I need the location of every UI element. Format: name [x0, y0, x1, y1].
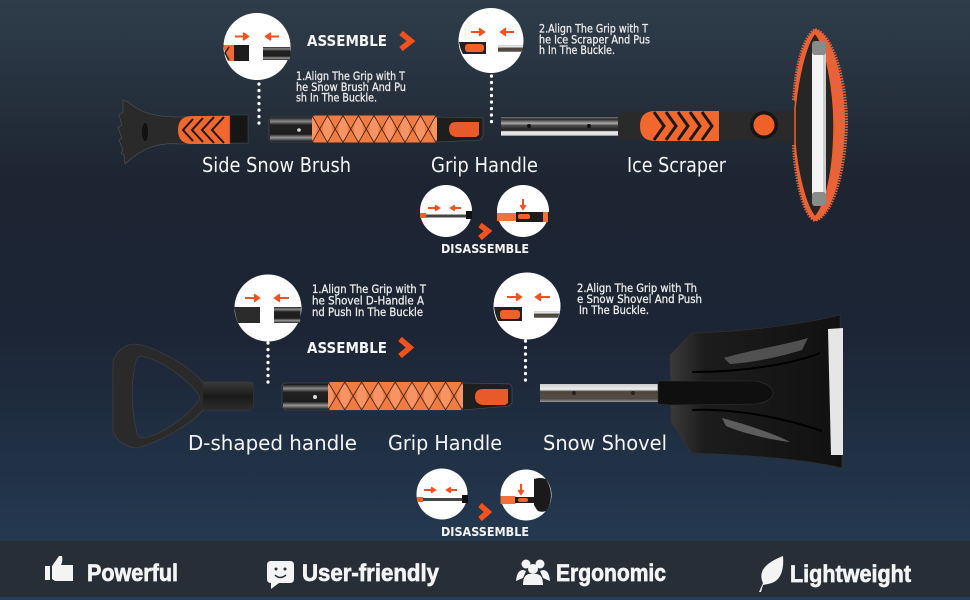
- ice scraper: [501, 29, 846, 221]
- instruction 1 top: [296, 69, 406, 104]
- instruction 1 top: 1.Align The Grip with T: [296, 69, 406, 83]
- label: side snow brush: Side Snow Brush: [202, 153, 351, 177]
- instruction 2 top: h In The Buckle.: [539, 43, 615, 57]
- dotted connector 1: [257, 84, 261, 129]
- instruction 2 bottom: 2.Align The Grip with Th: [577, 281, 697, 295]
- detail circle: brush to grip: [224, 13, 290, 80]
- instruction 1 bottom: nd Push In The Buckle: [312, 305, 423, 319]
- dotted connector 4: [524, 341, 527, 385]
- instruction 2 bottom: e Snow Shovel And Push: [577, 292, 702, 306]
- grip handle top: [269, 116, 483, 142]
- disassemble arrow top: [480, 225, 488, 238]
- instruction 2 bottom: [577, 281, 702, 317]
- disassemble circle bottom right: [500, 470, 552, 520]
- assemble label top: ASSEMBLE: [307, 32, 387, 50]
- icon: feather: [759, 556, 783, 592]
- snow shovel: [540, 315, 843, 468]
- label: ergonomic: Ergonomic: [556, 560, 666, 587]
- instruction 2 top: he Ice Scraper And Pus: [539, 32, 650, 46]
- instruction 2 top: [539, 22, 650, 57]
- side snow brush: [118, 100, 248, 164]
- icon: smiling chat bubble: [267, 561, 294, 589]
- label: snow shovel: Snow Shovel: [543, 431, 667, 455]
- disassemble arrow bottom: [480, 505, 488, 519]
- label: grip handle top: Grip Handle: [431, 153, 538, 177]
- label: lightweight: Lightweight: [790, 561, 911, 588]
- D-shaped handle: [113, 344, 253, 448]
- instruction 1 top: he Snow Brush And Pu: [296, 80, 406, 94]
- instruction 1 top: sh In The Buckle.: [296, 90, 377, 104]
- instruction 1 bottom: [312, 282, 427, 319]
- label: D-shaped handle: D-shaped handle: [188, 431, 357, 455]
- label: grip handle bottom: Grip Handle: [388, 431, 502, 455]
- disassemble circle top right: [497, 185, 549, 237]
- disassemble label top: DISASSEMBLE: [441, 242, 529, 256]
- icon: thumbs up: [45, 556, 73, 581]
- instruction 1 bottom: he Shovel D-Handle A: [312, 294, 424, 308]
- bottom feature band: [0, 541, 970, 597]
- label: ice scraper: Ice Scraper: [627, 153, 727, 177]
- dotted connector 3: [266, 343, 270, 387]
- disassemble circle bottom left: [416, 468, 468, 520]
- label: user-friendly: User-friendly: [302, 560, 440, 587]
- detail circle: grip to shovel: [494, 272, 560, 340]
- grip handle bottom: [282, 382, 512, 410]
- icon: people group: [516, 560, 550, 585]
- detail circle: D-handle to grip: [234, 274, 302, 342]
- instruction 1 bottom: 1.Align The Grip with T: [312, 282, 427, 296]
- instruction 2 bottom: In The Buckle.: [579, 303, 649, 317]
- disassemble label bottom: DISASSEMBLE: [441, 525, 529, 539]
- detail circle: grip to scraper: [458, 8, 524, 73]
- instruction 2 top: 2.Align The Grip with T: [539, 22, 649, 36]
- label: powerful: Powerful: [87, 560, 178, 587]
- dotted connector 2: [490, 76, 493, 122]
- disassemble circle top left: [420, 185, 472, 237]
- assemble label bottom: ASSEMBLE: [307, 339, 387, 357]
